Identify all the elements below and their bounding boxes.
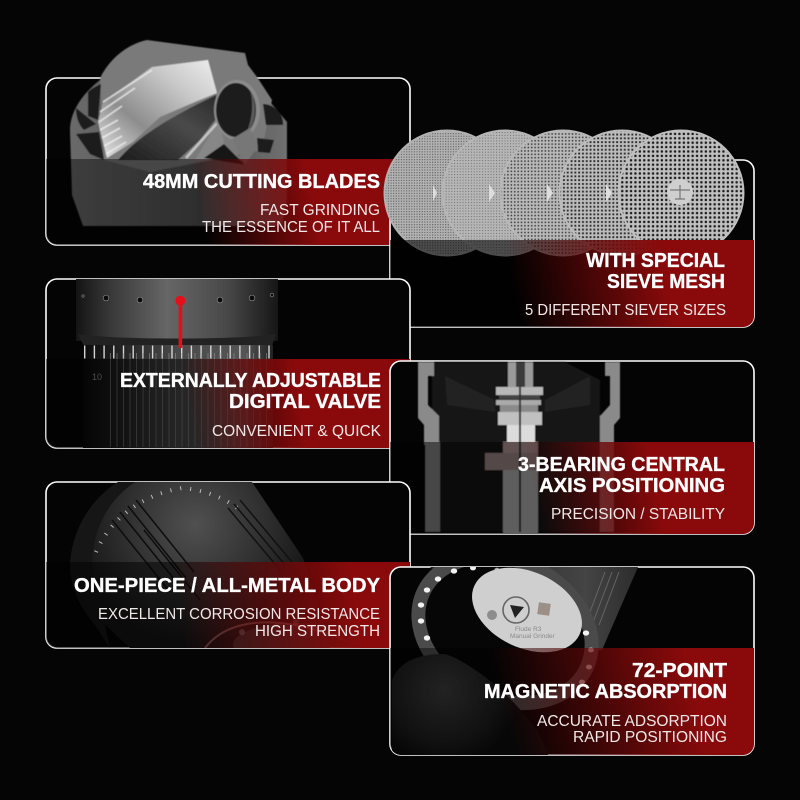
image: grinder dial: 10 [92,372,102,382]
image: grinder dial [76,279,278,448]
subtext: HIGH STRENGTH [255,623,380,640]
heading [484,659,727,703]
heading: AXIS POSITIONING [539,474,725,497]
image: magnetic ring and disc [392,567,638,755]
red band [390,648,754,755]
heading [586,249,725,293]
disc label [472,568,582,652]
subtext: ACCURATE ADSORPTION [537,713,727,730]
heading: 72-POINT [632,659,727,682]
heading: 3-BEARING CENTRAL [518,453,725,476]
image: five sieve discs [384,130,744,256]
red band [46,359,410,448]
subtext: FAST GRINDING [260,202,380,219]
subtext: 5 DIFFERENT SIEVER SIZES [525,302,726,319]
panel: adjustable digital valve [46,279,410,448]
ring magnets [418,566,594,684]
heading: 48MM CUTTING BLADES [143,170,380,193]
heading: EXTERNALLY ADJUSTABLE [120,369,381,392]
disc label: Flude R3 [515,626,542,633]
heading: MAGNETIC ABSORPTION [484,680,727,703]
subtext: EXCELLENT CORROSION RESISTANCE [98,606,380,623]
subtext: RAPID POSITIONING [573,729,727,746]
panel: 3-bearing central axis [390,361,754,534]
heading: SIEVE MESH [607,270,725,293]
red band [390,240,754,327]
red band [46,562,410,648]
subtext: PRECISION / STABILITY [551,506,725,523]
icon: red indicator [175,296,185,348]
subtext: THE ESSENCE OF IT ALL [202,219,380,236]
subtext [98,606,380,640]
subtext [537,713,727,746]
image: axis cross-section [418,362,620,534]
heading: DIGITAL VALVE [229,390,381,413]
disc label: Manual Grinder [510,633,556,640]
panel: 48mm cutting blades [46,40,410,245]
image: grinder burr [70,40,287,226]
subtext [202,202,380,236]
panel: one-piece metal body [46,482,410,667]
heading [120,369,381,413]
heading: ONE-PIECE / ALL-METAL BODY [74,574,380,597]
panel: 72-point magnetic absorption [389,566,755,756]
panel: special sieve mesh [384,130,754,327]
image: grinder body [70,482,344,648]
red band [390,442,754,534]
heading [518,453,725,497]
subtext: CONVENIENT & QUICK [212,423,381,440]
red band [46,159,410,245]
heading: WITH SPECIAL [586,249,725,272]
